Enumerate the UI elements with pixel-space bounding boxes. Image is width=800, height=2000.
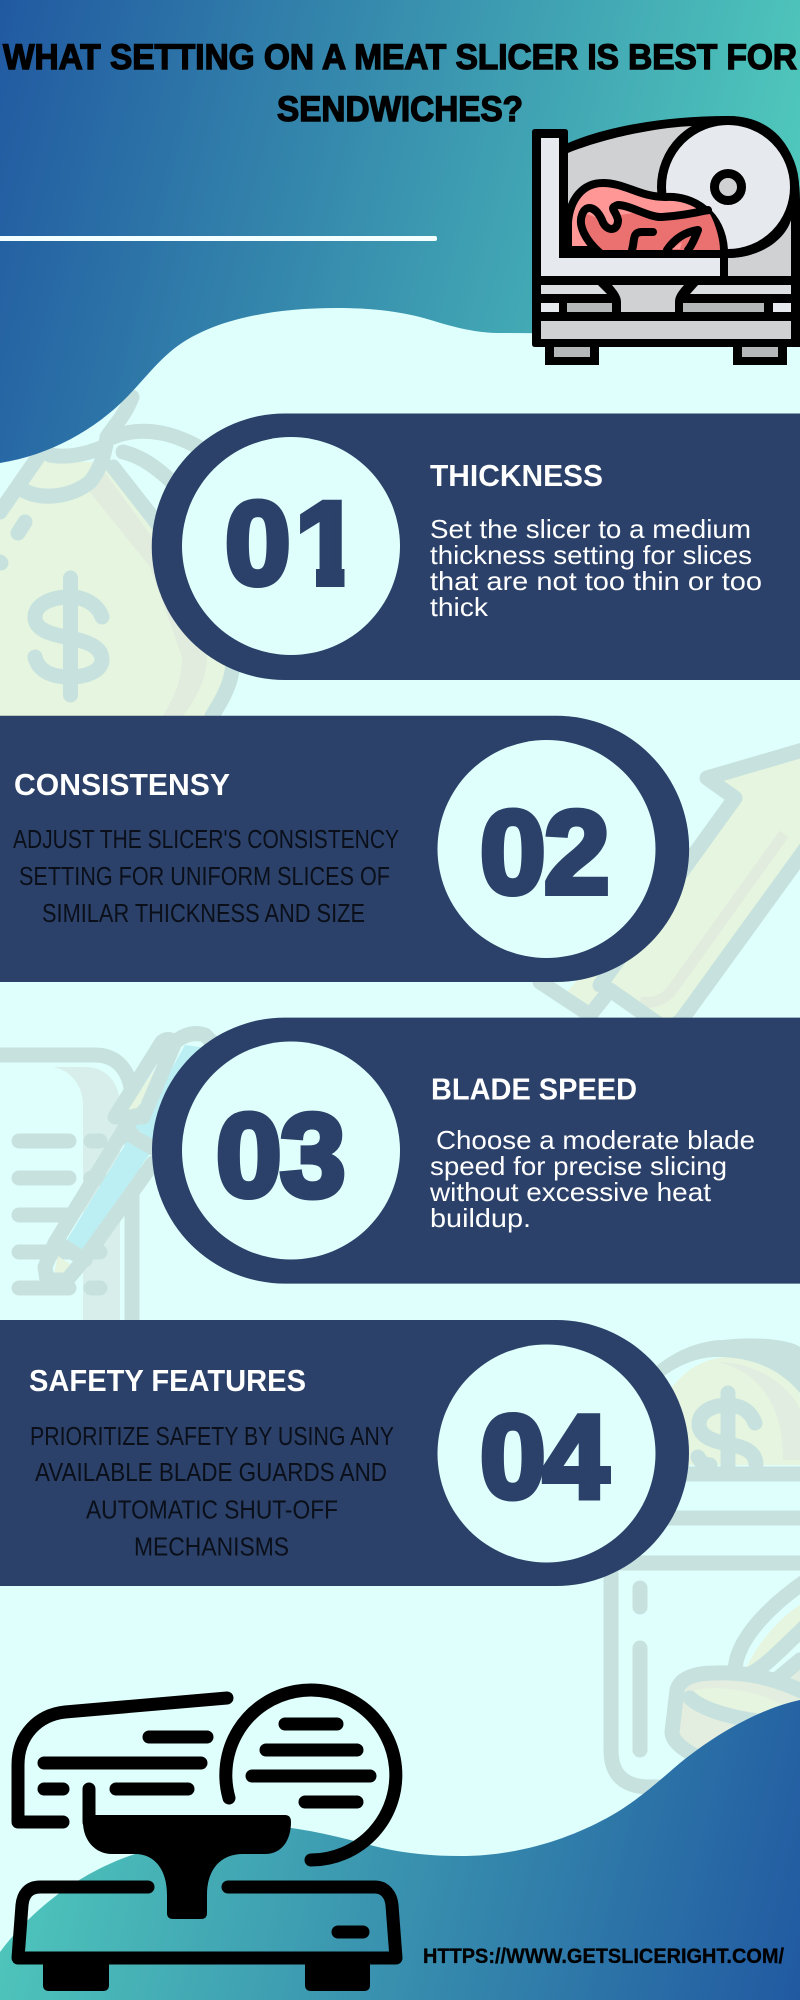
body text: safety features: PRIORITIZE SAFETY BY USING ANY [30,1421,394,1451]
body text: consistency [13,824,399,928]
watermark: coins and pot [611,1338,800,1787]
body text: consistency: ADJUST THE SLICER'S CONSISTENCY [13,824,399,854]
title [3,38,797,129]
number circle 03 [182,1042,400,1260]
title underline [0,236,437,241]
body text: blade speed: Choose a moderate blade [436,1125,755,1155]
panel: 04 safety features [0,1320,689,1586]
heading: blade speed: BLADE SPEED [431,1072,637,1106]
body text: safety features: AVAILABLE BLADE GUARDS AND [35,1457,387,1487]
icon: meat slicer with steak [532,116,800,365]
body text: thickness: thick [430,592,489,622]
number circle 04 [438,1344,656,1562]
number 03: 03 [216,1090,346,1222]
number 02: 02 [480,787,610,919]
number circle 02 [438,740,656,958]
heading: safety features: SAFETY FEATURES [29,1363,306,1398]
watermark: note and pencil [0,1034,215,1320]
body text: safety features: MECHANISMS [134,1532,289,1562]
body text: thickness: Set the slicer to a medium [430,514,751,544]
heading: thickness: THICKNESS [430,458,603,493]
number circle 01 [182,437,400,655]
panel: 03 blade speed [152,1018,800,1284]
bottom gradient wave [0,1700,800,2000]
title: SENDWICHES? [277,90,523,129]
body text: blade speed: buildup. [430,1203,531,1233]
top gradient wave [0,0,800,463]
panel: 01 thickness [152,414,800,680]
panel: 02 consistency [0,716,689,982]
heading: consistensy: CONSISTENSY [14,767,230,802]
watermark: growth arrow [540,742,800,1026]
number 01 [226,498,344,588]
watermark: money bag [0,397,235,716]
website url: HTTPS://WWW.GETSLICERIGHT.COM/ [423,1945,784,1968]
icon: black outline meat slicer [18,1690,396,1991]
number 01: 0 [225,478,291,610]
body text: thickness [430,514,762,622]
body text: consistency: SIMILAR THICKNESS AND SIZE [42,898,365,928]
body text: thickness: that are not too thin or too [430,566,762,596]
body text: blade speed: without excessive heat [429,1177,712,1207]
body text: thickness: thickness setting for slices [430,540,752,570]
number 04: 04 [480,1392,609,1524]
body text: safety features: AUTOMATIC SHUT-OFF [86,1494,338,1524]
body text: consistency: SETTING FOR UNIFORM SLICES OF [19,861,390,891]
number 01: 1 [295,478,361,610]
body text: safety features [30,1421,394,1562]
body text: blade speed [429,1125,755,1233]
body text: blade speed: speed for precise slicing [430,1151,727,1181]
